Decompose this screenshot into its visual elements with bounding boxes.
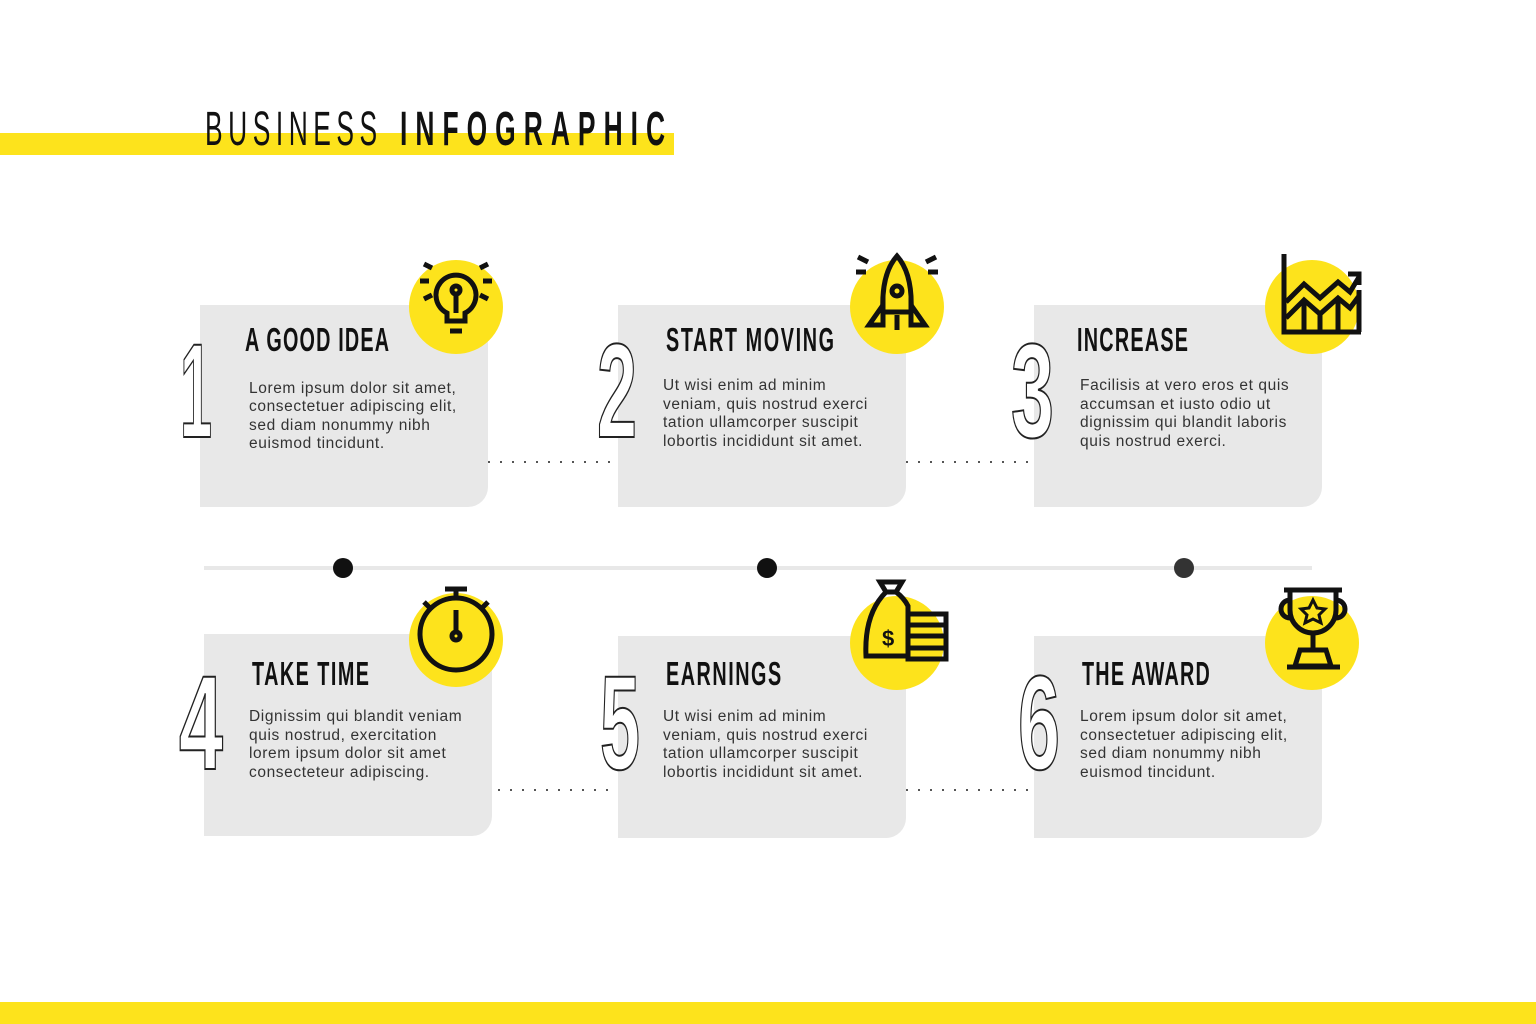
panel 4: Dignissim qui blandit veniam xyxy=(249,708,462,725)
panel 4: lorem ipsum dolor sit amet xyxy=(249,745,446,762)
panel 3: 3 xyxy=(1011,317,1054,466)
icon: trophy xyxy=(1281,590,1345,667)
icon: money bag xyxy=(866,582,946,659)
panel 1: sed diam nonummy nibh xyxy=(249,417,430,434)
panel 2: 2 xyxy=(597,317,637,466)
panel 3 xyxy=(1011,254,1361,507)
panel 5: EARNINGS xyxy=(666,655,781,692)
panel 3: quis nostrud exerci. xyxy=(1080,433,1226,450)
panel 5: lobortis incididunt sit amet. xyxy=(663,764,863,781)
icon: growth chart xyxy=(1284,254,1361,332)
panel 2: tation ullamcorper suscipit xyxy=(663,414,858,431)
bottom bar xyxy=(0,1002,1536,1024)
panel 6: sed diam nonummy nibh xyxy=(1080,745,1261,762)
title: INFOGRAPHIC xyxy=(400,103,665,156)
panel 5: $ xyxy=(882,626,894,651)
panel 1: A GOOD IDEA xyxy=(245,321,389,358)
title xyxy=(205,103,665,156)
panel 4: consecteteur adipiscing. xyxy=(249,764,430,781)
panel 6 xyxy=(1018,590,1359,838)
panel 5: veniam, quis nostrud exerci xyxy=(663,727,868,744)
panel 6: Lorem ipsum dolor sit amet, xyxy=(1080,708,1287,725)
panel 2: lobortis incididunt sit amet. xyxy=(663,433,863,450)
panel 1: Lorem ipsum dolor sit amet, xyxy=(249,380,456,397)
panel 3: dignissim qui blandit laboris xyxy=(1080,414,1287,431)
panel 1: euismod tincidunt. xyxy=(249,435,385,452)
icon: light bulb xyxy=(420,264,492,331)
panel 3: Facilisis at vero eros et quis xyxy=(1080,377,1289,394)
panel 3: INCREASE xyxy=(1077,321,1188,358)
panel 5: tation ullamcorper suscipit xyxy=(663,745,858,762)
panel 6: euismod tincidunt. xyxy=(1080,764,1216,781)
icon: stopwatch xyxy=(420,589,492,670)
panel 2: START MOVING xyxy=(666,321,834,358)
panel 1 xyxy=(180,260,503,507)
panel 5: Ut wisi enim ad minim xyxy=(663,708,826,725)
panel 5 xyxy=(600,582,946,838)
panel 6: consectetuer adipiscing elit, xyxy=(1080,727,1288,744)
title: BUSINESS xyxy=(205,103,377,156)
panel 3: accumsan et iusto odio ut xyxy=(1080,396,1271,413)
panel 2: veniam, quis nostrud exerci xyxy=(663,396,868,413)
icon: rocket xyxy=(856,256,938,330)
panel 1: consectetuer adipiscing elit, xyxy=(249,398,457,415)
panel 2 xyxy=(597,256,944,507)
header bar xyxy=(0,133,674,155)
timeline xyxy=(204,558,1312,578)
panel 4 xyxy=(179,589,503,836)
dotted connectors xyxy=(488,462,1034,790)
panel 6: THE AWARD xyxy=(1082,655,1210,692)
panel 4: TAKE TIME xyxy=(252,655,369,692)
panel 1: 1 xyxy=(180,317,212,466)
panel 4: quis nostrud, exercitation xyxy=(249,727,437,744)
panel 5: 5 xyxy=(600,649,640,798)
panel 2: Ut wisi enim ad minim xyxy=(663,377,826,394)
panel 4: 4 xyxy=(179,649,223,798)
panel 6: 6 xyxy=(1018,649,1060,798)
